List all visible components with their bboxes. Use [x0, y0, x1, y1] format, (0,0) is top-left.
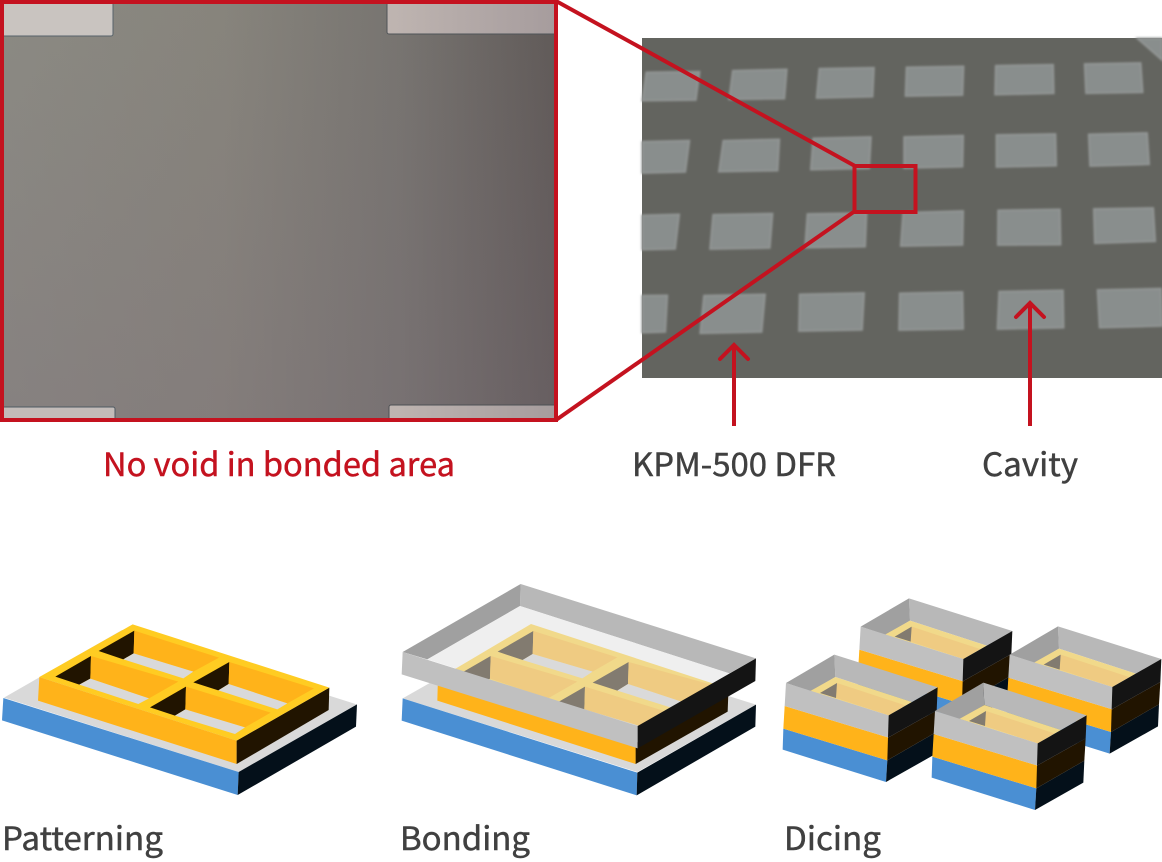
diagram: dicing	[783, 598, 1161, 810]
caption: KPM-500 DFR: KPM-500 DFR	[632, 440, 836, 486]
cavity grid	[642, 38, 1162, 333]
corner cavity: bottom left	[2, 407, 115, 421]
panel: wafer photo with cavity grid	[642, 38, 1162, 378]
caption: Dicing: Dicing	[784, 814, 881, 860]
panel: magnified bonded area photo	[2, 2, 556, 421]
corner cavity: bottom right	[389, 405, 556, 421]
arrow: KPM-500 DFR	[720, 345, 748, 426]
diagram: patterning	[2, 624, 357, 795]
diagram: bonding	[402, 584, 756, 795]
die: left	[783, 655, 938, 782]
die: back	[857, 598, 1012, 726]
zoom connector lines and selection box	[556, 1, 916, 420]
magnified view red frame	[2, 2, 556, 420]
die: front	[932, 683, 1087, 810]
caption: Cavity: Cavity	[982, 440, 1078, 486]
die: right	[1006, 626, 1161, 754]
corner cavity: top right	[387, 2, 556, 34]
corner cavity: top left	[2, 2, 113, 36]
caption: Bonding: Bonding	[400, 814, 530, 860]
caption: no void: No void in bonded area	[103, 440, 455, 486]
caption: Patterning: Patterning	[2, 814, 163, 860]
arrow: cavity	[1016, 303, 1044, 426]
